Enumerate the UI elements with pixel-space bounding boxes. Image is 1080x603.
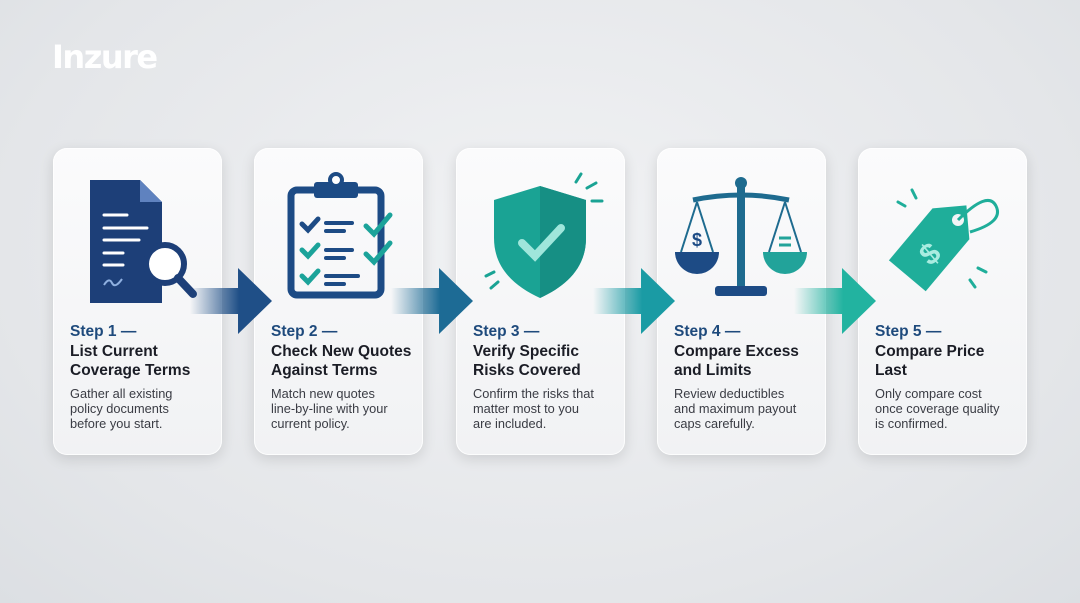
arrow 3 — [595, 268, 675, 334]
text block 5: Compare Price Last — [875, 343, 984, 379]
text block 4: Step 4 — — [674, 323, 740, 340]
arrow 2 — [393, 268, 473, 334]
text block 3: Verify Specific Risks Covered — [473, 343, 581, 379]
icon: scales — [675, 177, 807, 296]
text block 1: Step 1 — — [70, 323, 136, 340]
text block 3: Step 3 — — [473, 323, 539, 340]
text block 1 — [70, 323, 190, 431]
text block 3 — [473, 323, 594, 431]
arrow 4 — [796, 268, 876, 334]
card 1 — [53, 148, 222, 455]
icon: price tag: $ — [913, 236, 948, 272]
text block 2 — [271, 323, 411, 431]
card 2 — [254, 148, 423, 455]
icon: scales: $ — [692, 230, 702, 250]
logo: Inzure — [52, 38, 157, 76]
card 4 — [657, 148, 826, 455]
text block 2: Check New Quotes Against Terms — [271, 343, 411, 379]
text block 4: Compare Excess and Limits — [674, 343, 799, 379]
text block 3: Confirm the risks that matter most to you are included. — [473, 386, 594, 431]
icon: price tag — [888, 188, 1000, 292]
text block 2: Step 2 — — [271, 323, 337, 340]
text block 1: Gather all existing policy documents before you start. — [70, 386, 172, 431]
text block 5: Step 5 — — [875, 323, 941, 340]
text block 5: Only compare cost once coverage quality is confirmed. — [875, 386, 1000, 431]
icon: shield check — [484, 172, 604, 298]
text block 5 — [875, 323, 1000, 431]
text block 4 — [674, 323, 799, 431]
text block 2: Match new quotes line-by-line with your current policy. — [271, 386, 388, 431]
card 3 — [456, 148, 625, 455]
icon: clipboard checklist — [288, 172, 392, 298]
text block 1: List Current Coverage Terms — [70, 343, 190, 379]
text block 4: Review deductibles and maximum payout caps carefully. — [674, 386, 796, 431]
icon: document with magnifier — [90, 180, 197, 303]
card 5 — [858, 148, 1027, 455]
arrow 1 — [192, 268, 272, 334]
